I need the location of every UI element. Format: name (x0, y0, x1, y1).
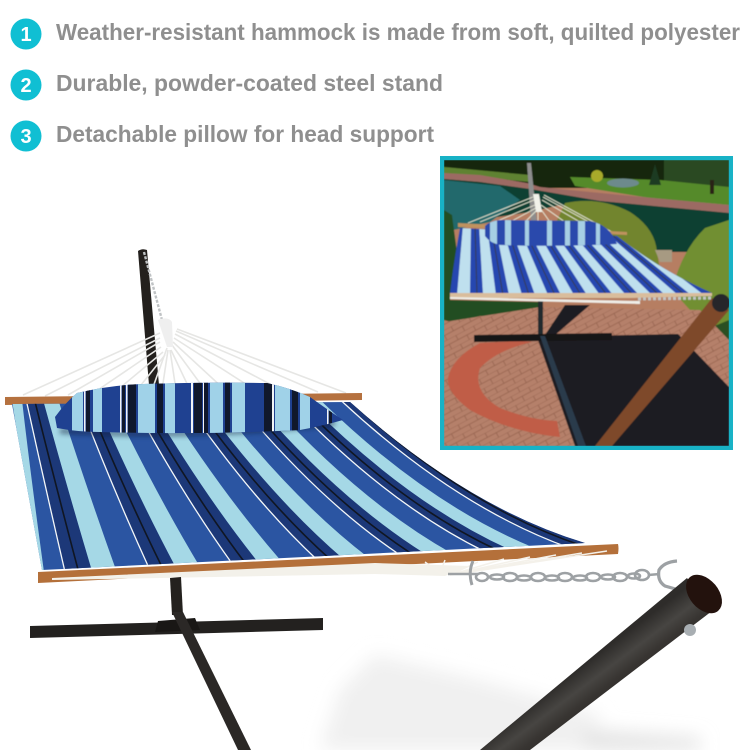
ground shadows (320, 655, 700, 750)
hammock bed with stripes (12, 400, 597, 572)
foreground stand pole (480, 568, 729, 750)
inset photo: hammock on brick patio (440, 156, 733, 450)
stand leg (172, 612, 251, 750)
rope clamp (158, 318, 173, 347)
inset: front bar (450, 293, 712, 298)
feature 2: 2 (20, 75, 32, 97)
inset: treeline (444, 160, 665, 188)
feature 3: 3 (20, 126, 32, 148)
inset: chain (638, 298, 712, 299)
feature 3: Detachable pillow for head support (56, 121, 434, 147)
feature list (10, 18, 740, 152)
inset: pond (444, 179, 729, 252)
shadow under pillow (60, 420, 335, 437)
dark stripes (26, 400, 597, 571)
pole end cap (679, 568, 729, 620)
inset: brick ring (448, 341, 560, 437)
hammock stand upright (138, 249, 162, 385)
front spreader bar (38, 544, 618, 583)
black pinstripes (35, 400, 583, 571)
front bar ropes (425, 551, 607, 575)
inset: spreader bars (458, 223, 627, 235)
spreader ropes (23, 329, 346, 396)
inset: ropes (468, 195, 612, 232)
inset: brick patio (444, 307, 729, 446)
inset: bushes (555, 201, 660, 270)
chain and hooks (448, 561, 679, 590)
left edge light sliver (12, 400, 44, 572)
inset: wooden pole (595, 298, 729, 446)
feature 1: Weather-resistant hammock is made from soft, quilted polyester (56, 19, 740, 45)
inset: stand (527, 163, 537, 222)
inset: hammock shadow (537, 334, 729, 446)
feature 2: Durable, powder-coated steel stand (56, 70, 443, 96)
light stripes (43, 400, 537, 571)
stand chain (144, 252, 162, 320)
feature 1: 1 (20, 24, 32, 46)
white pinstripes (26, 400, 570, 571)
pillow (55, 380, 343, 436)
pole bolt (684, 624, 696, 636)
lower post and base (30, 577, 323, 750)
top spreader bar (5, 393, 362, 405)
inset: pillow (484, 218, 619, 248)
inset: hammock bed (449, 227, 712, 294)
